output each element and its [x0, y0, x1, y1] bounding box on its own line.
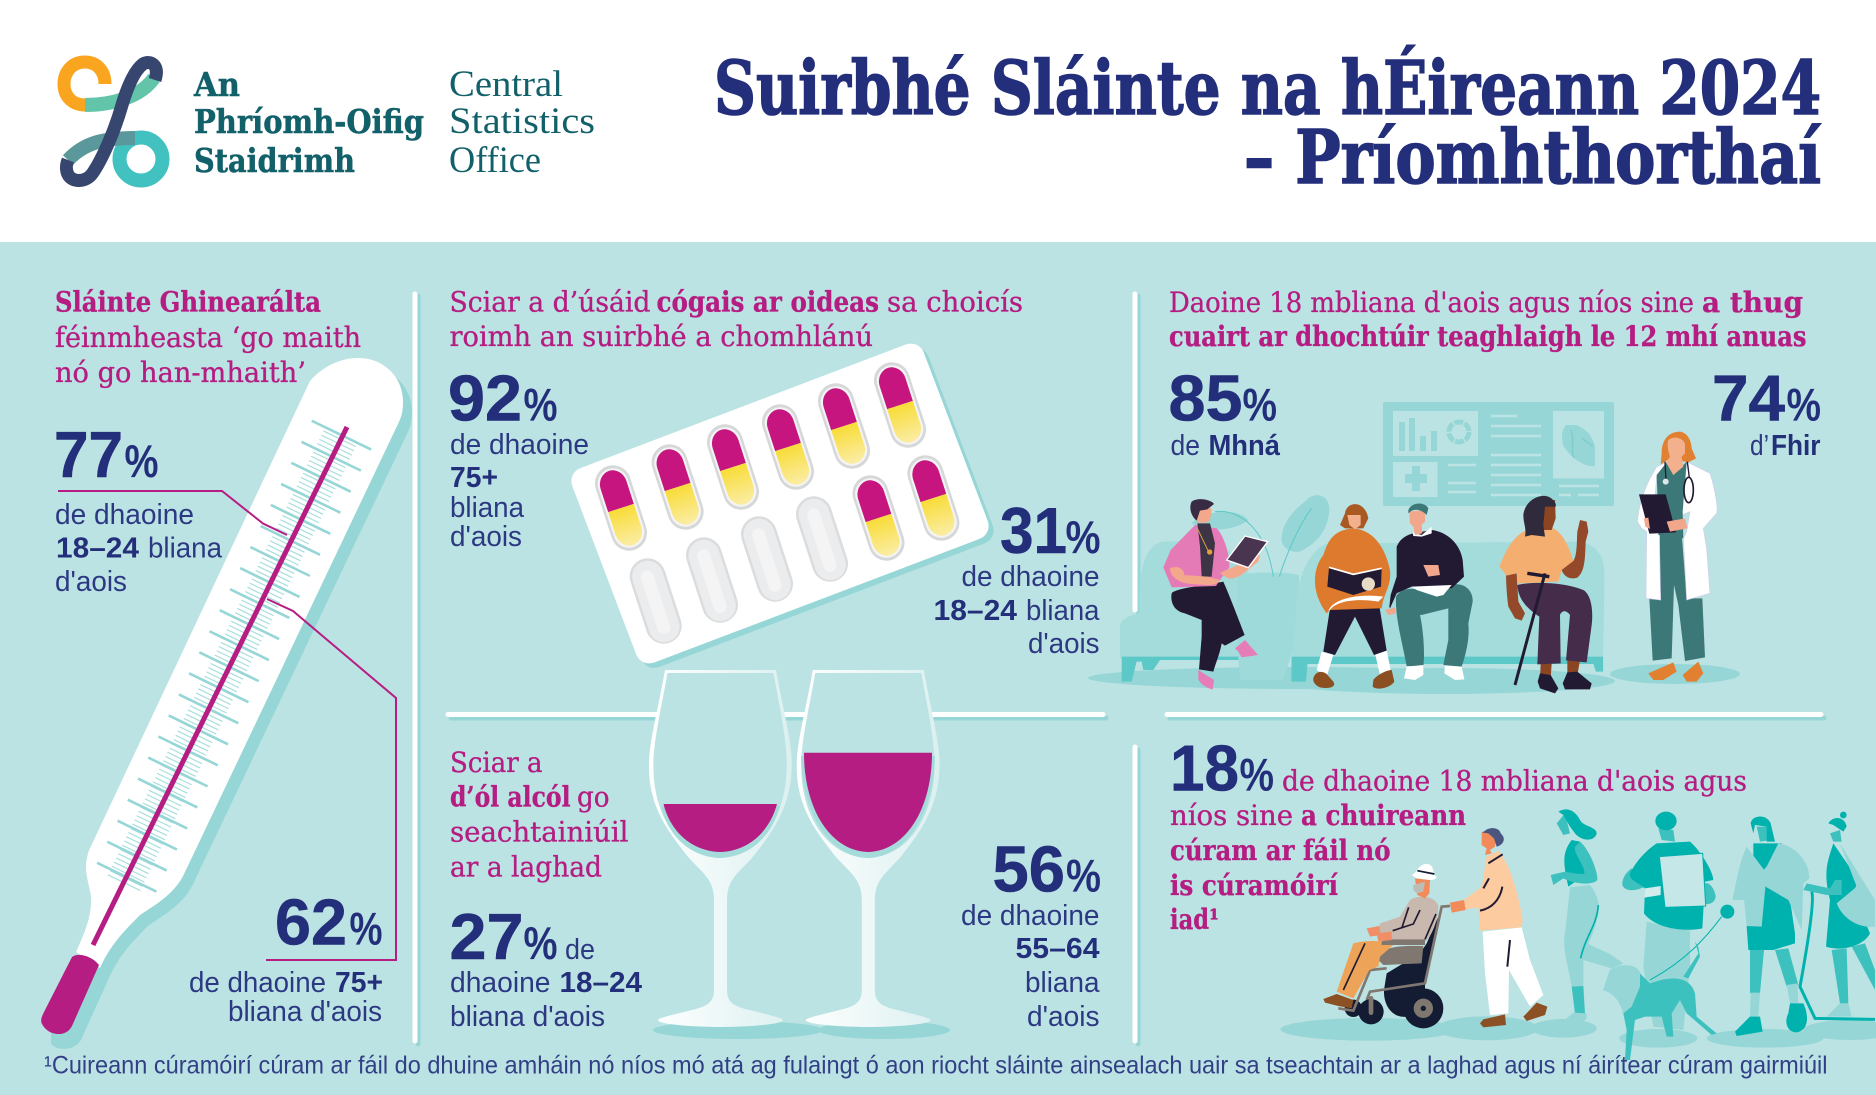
heading: prescribed medicines	[450, 286, 1023, 353]
stat and heading: 18% carers: níos sine	[1170, 799, 1293, 832]
doctor	[1637, 432, 1717, 682]
stat: 27% aged 18-24: de	[565, 934, 595, 966]
wine level glass 2	[801, 756, 935, 858]
man with backpack	[1622, 812, 1716, 1030]
stat: 62% aged 75+	[189, 599, 396, 1028]
blister pack of capsules	[567, 340, 998, 672]
stat: 56% aged 55-64	[961, 832, 1101, 1033]
stat: 27% aged 18-24: 18–24	[560, 967, 642, 999]
title	[714, 44, 1821, 201]
heading: GP visits	[1169, 286, 1806, 353]
thermometer bulb	[41, 955, 99, 1034]
carer	[1450, 828, 1547, 1027]
logo wordmark Irish	[193, 65, 424, 180]
heading: alcohol	[450, 746, 629, 884]
stat: 31% aged 18-24: 18–24	[934, 595, 1017, 627]
panel: carers	[1170, 732, 1876, 1060]
stat: 85% women: %	[1242, 378, 1277, 430]
stat: 92% aged 75+: 92	[448, 362, 522, 434]
stat: 77% aged 18-24: d'aois	[55, 566, 127, 598]
person reading, pink shirt	[1163, 499, 1268, 689]
stat: 31% aged 18-24: d'aois	[1028, 628, 1100, 660]
stat: 77% aged 18-24: %	[124, 435, 158, 487]
stat: 74% men	[1712, 362, 1821, 462]
stat: 92% aged 75+: d'aois	[450, 521, 522, 553]
panel: prescribed medicines	[448, 286, 1100, 672]
stat: 31% aged 18-24	[934, 494, 1100, 660]
stat: 56% aged 55-64: %	[1066, 850, 1101, 902]
heading: alcohol: d’ól alcól	[450, 780, 570, 814]
woman on scooter	[1800, 812, 1875, 1019]
stat: 56% aged 55-64: d'aois	[1027, 1001, 1100, 1033]
potted plant	[1192, 495, 1329, 680]
stat: 27% aged 18-24: bliana d'aois	[450, 1001, 605, 1033]
stat: 31% aged 18-24: 31	[1000, 494, 1067, 567]
stat: 27% aged 18-24: 27	[450, 900, 524, 973]
mercury column	[93, 427, 347, 945]
stat: 62% aged 75+: 75+	[335, 967, 383, 999]
stat: 92% aged 75+: bliana	[450, 492, 525, 524]
stat: 74% men: 74	[1712, 362, 1785, 434]
stat and heading: 18% carers: a chuireann	[1301, 799, 1466, 832]
panel: general health	[41, 286, 412, 1049]
stat: 85% women: de	[1170, 430, 1200, 462]
heading: general health: Sláinte Ghinearálta	[55, 286, 321, 318]
heading: prescribed medicines: roimh an suirbhé a chomhlánú	[450, 320, 873, 353]
stat: 62% aged 75+: %	[350, 902, 382, 954]
stat: 62% aged 75+: de dhaoine	[189, 967, 326, 999]
stat: 74% men: %	[1786, 378, 1821, 430]
person seated, dark sweater and green trousers	[1385, 504, 1473, 680]
stat and heading: 18% carers	[1170, 732, 1747, 936]
heading: prescribed medicines: cógais ar oideas	[656, 286, 879, 318]
stat: 77% aged 18-24: 18–24	[56, 532, 139, 564]
panel: alcohol	[450, 670, 1101, 1039]
wheelchair with older man	[1323, 864, 1450, 1028]
plant and waiting room furniture	[1120, 495, 1329, 682]
logo mark	[64, 62, 162, 181]
floor shadows walkers	[1531, 1019, 1876, 1048]
heading: alcohol: ar a laghad	[450, 850, 602, 884]
logo wordmark English: Central	[449, 64, 563, 105]
stat: 77% aged 18-24	[54, 418, 287, 598]
stat: 85% women	[1168, 362, 1281, 462]
stat: 27% aged 18-24	[450, 900, 642, 1033]
heading: general health	[55, 286, 361, 389]
stat: 92% aged 75+: %	[524, 378, 558, 430]
stat: 85% women: 85	[1168, 362, 1242, 434]
panel: family doctor visits	[1088, 286, 1821, 694]
stat: 27% aged 18-24: %	[524, 917, 558, 969]
heading: alcohol: Sciar a	[450, 746, 542, 779]
thermometer	[41, 358, 412, 1049]
logo wordmark English: Office	[449, 140, 541, 181]
heading: alcohol: go	[577, 780, 610, 814]
wine level glass 1	[661, 806, 780, 858]
medical screen on wall	[1383, 402, 1614, 506]
woman walking dog	[1650, 816, 1809, 1036]
logo wordmark Irish: Phríomh-Oifig	[194, 102, 424, 141]
jogger	[1551, 809, 1623, 1024]
stat: 92% aged 75+	[448, 362, 589, 553]
heading: prescribed medicines: sa choicís	[887, 286, 1023, 318]
walkers illustration	[1531, 809, 1876, 1060]
carer pushing wheelchair illustration	[1323, 828, 1547, 1028]
stat: 62% aged 75+: bliana d'aois	[228, 996, 382, 1028]
stat: 56% aged 55-64: 55–64	[1016, 933, 1100, 965]
heading: prescribed medicines: Sciar a d’úsáid	[450, 286, 651, 318]
stat and heading: 18% carers: %	[1240, 748, 1274, 800]
stat and heading: 18% carers: is cúramóirí	[1170, 869, 1338, 902]
stat and heading: 18% carers: 18	[1170, 732, 1239, 804]
heading: general health: nó go han-mhaith’	[55, 356, 306, 389]
stat: 77% aged 18-24: de dhaoine	[55, 499, 194, 531]
stat: 74% men: d’	[1750, 430, 1769, 462]
logo wordmark English	[449, 64, 595, 181]
heading: general health: féinmheasta ‘go maith	[55, 321, 361, 354]
floor shadows	[1088, 664, 1740, 694]
stat: 56% aged 55-64: de dhaoine	[961, 900, 1100, 932]
stat: 27% aged 18-24: dhaoine	[450, 967, 550, 999]
stat: 74% men: Fhir	[1771, 430, 1820, 462]
sofa	[1292, 542, 1605, 682]
stat: 31% aged 18-24: %	[1066, 511, 1100, 563]
stat: 92% aged 75+: de dhaoine	[450, 429, 589, 461]
stat and heading: 18% carers: de dhaoine 18 mbliana d'aois agus	[1282, 764, 1747, 798]
logo wordmark Irish: Staidrimh	[194, 141, 355, 180]
person reading, orange hoodie	[1313, 504, 1394, 689]
logo: Central Statistics Office	[64, 62, 595, 181]
stat: 92% aged 75+: 75+	[450, 462, 498, 494]
body background	[0, 242, 1876, 1095]
heading: GP visits: a thug	[1702, 286, 1803, 319]
stat and heading: 18% carers: cúram ar fáil nó	[1170, 834, 1390, 867]
stat: 77% aged 18-24: bliana	[148, 532, 223, 564]
wine glasses	[649, 670, 950, 1039]
stat: 56% aged 55-64: bliana	[1025, 967, 1100, 999]
heading: alcohol: seachtainiúil	[450, 816, 629, 848]
stat: 62% aged 75+: 62	[275, 886, 347, 958]
person with cane	[1499, 496, 1592, 693]
heading: GP visits: Daoine 18 mbliana d'aois agus níos sine	[1169, 286, 1694, 319]
logo wordmark English: Statistics	[449, 101, 595, 142]
header background	[0, 0, 1876, 242]
thermometer scale ticks	[123, 434, 342, 885]
stat: 77% aged 18-24: 77	[54, 418, 123, 491]
stat: 56% aged 55-64: 56	[992, 832, 1065, 906]
stat: 85% women: Mhná	[1208, 430, 1281, 462]
divider lines with shadow	[415, 294, 1824, 1044]
logo wordmark Irish: An	[193, 65, 240, 104]
stat: 31% aged 18-24: bliana	[1026, 595, 1100, 627]
armchair	[1120, 541, 1255, 682]
floor shadows wheelchair	[1280, 1016, 1597, 1041]
stat and heading: 18% carers: iad¹	[1170, 903, 1219, 936]
stat: 31% aged 18-24: de dhaoine	[962, 561, 1100, 593]
dog	[1603, 942, 1717, 1060]
